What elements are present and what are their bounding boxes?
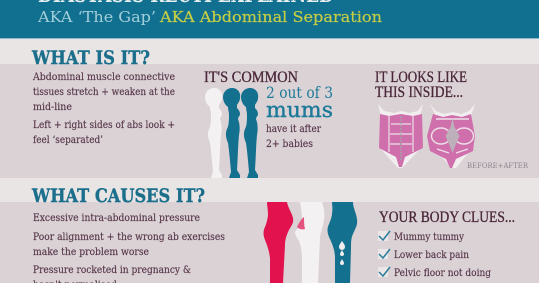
heading: it looks like this inside	[375, 69, 467, 101]
illustration: abdominal muscles after	[427, 104, 475, 168]
abdominal gap	[446, 118, 460, 153]
subtitle: AKA Abdominal Separation: AKA Abdominal Separation	[159, 8, 382, 26]
item: pelvic floor not doing: Pelvic floor not doing	[394, 268, 492, 279]
text block: definition: feel ‘separated’	[33, 135, 103, 146]
text block: causes: make the problem worse	[33, 247, 149, 258]
text block: causes: Excessive intra-abdominal pressure	[33, 213, 200, 224]
pain mark	[297, 217, 305, 229]
item: mummy tummy: Mummy tummy	[394, 232, 464, 243]
checklist	[378, 231, 492, 279]
section band: what causes it	[0, 178, 539, 202]
heading: its common: IT'S COMMON	[204, 69, 298, 86]
icon: white body with back pain	[295, 202, 324, 283]
stat: 2 out of 3 mums: 2 out of 3	[266, 84, 333, 102]
icon: teal body with drops	[328, 202, 357, 283]
text block: definition: tissues stretch + weaken at the	[33, 87, 175, 98]
text block: definition	[32, 72, 175, 146]
heading: what is it: WHAT IS IT?	[31, 47, 150, 69]
stat: 2 out of 3 mums: 2+ babies	[266, 139, 313, 150]
drops	[339, 241, 345, 265]
heading: it looks like this inside: THIS INSIDE...	[375, 84, 463, 101]
stat: 2 out of 3 mums: have it after	[266, 124, 321, 135]
text block: causes: Poor alignment + the wrong ab exercises	[33, 232, 225, 243]
item: lower back pain: Lower back pain	[394, 250, 469, 261]
icon: three pregnancy silhouettes	[205, 88, 258, 178]
heading: what causes it: WHAT CAUSES IT?	[31, 185, 205, 207]
text block: causes	[33, 213, 225, 283]
illustration: abdominal muscles before	[378, 104, 423, 168]
text block: causes: Pressure rocketed in pregnancy &	[33, 265, 191, 276]
header banner	[0, 0, 539, 39]
stat: 2 out of 3 mums: mums	[266, 98, 333, 122]
text block: definition: Left + right sides of abs look +	[33, 120, 175, 131]
silhouette: teal one	[223, 88, 240, 178]
heading: your body clues: YOUR BODY CLUES...	[379, 209, 515, 226]
silhouette: white	[205, 88, 222, 178]
text block: definition: mid-line	[33, 102, 72, 113]
heading: it looks like this inside: IT LOOKS LIKE	[375, 69, 467, 86]
caption: before + after: BEFORE+AFTER	[467, 162, 529, 170]
text block: definition: Abdominal muscle connective	[32, 72, 175, 83]
stat: 2 out of 3 mums	[266, 84, 333, 150]
icon: red body	[264, 202, 293, 283]
silhouette: teal two	[241, 88, 258, 178]
section band: what is it	[0, 39, 539, 64]
subtitle: AKA The Gap: AKA ‘The Gap’	[37, 8, 156, 26]
